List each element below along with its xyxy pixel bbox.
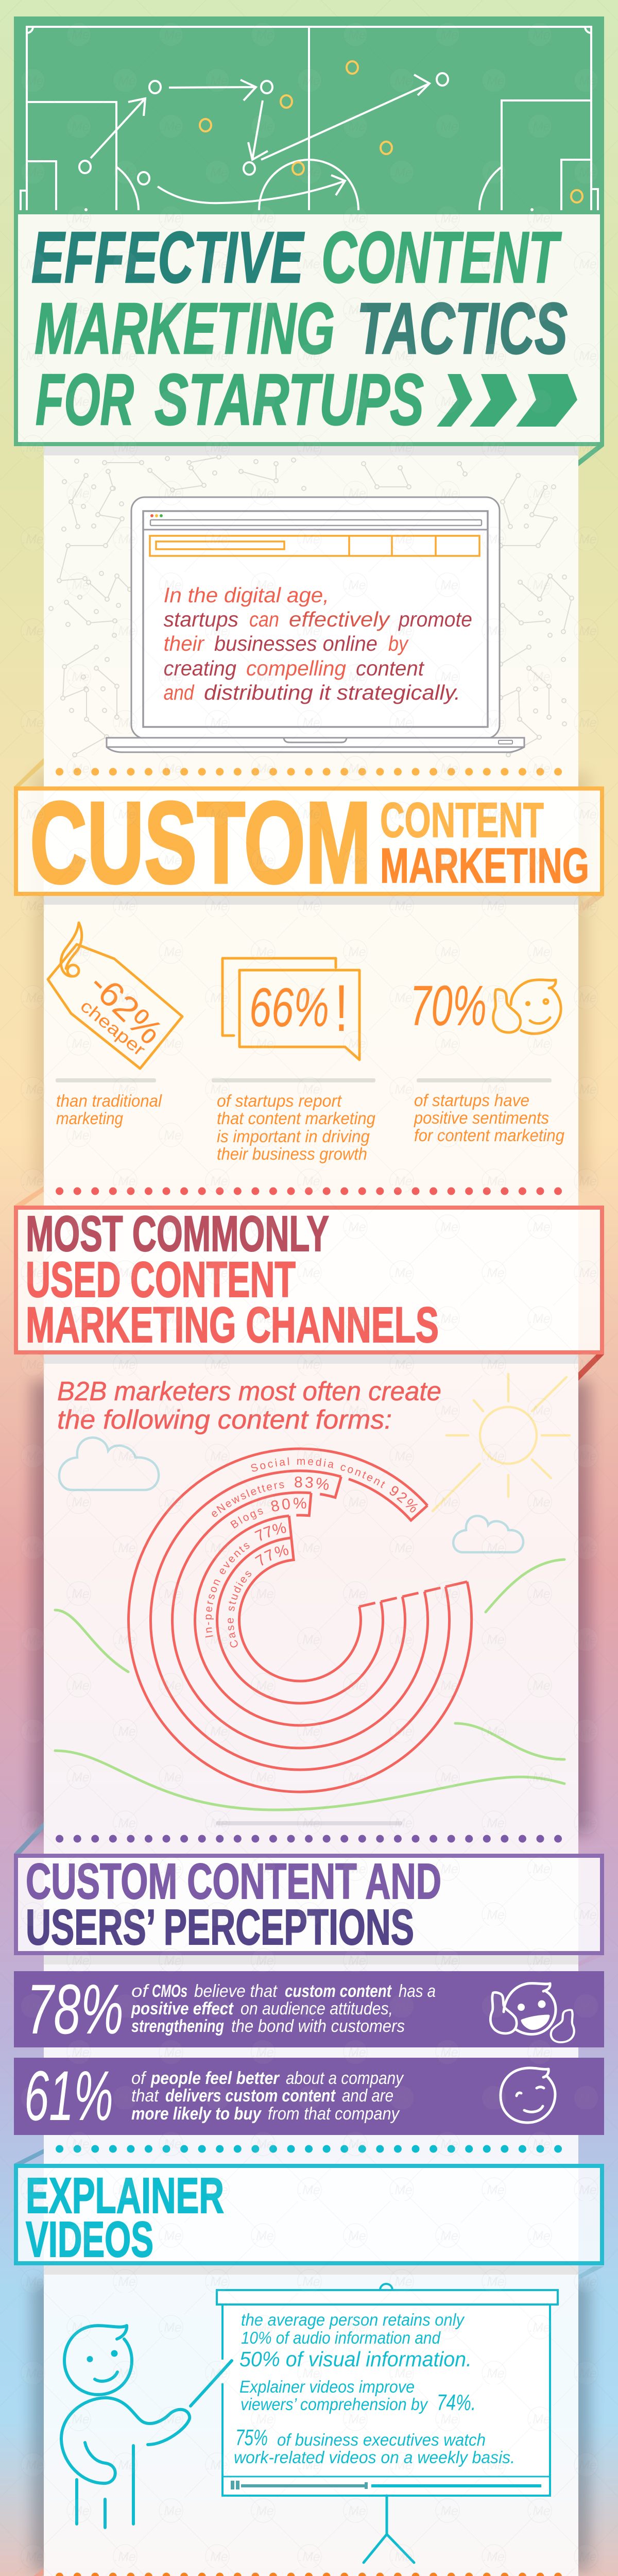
stat bar: 61% of people: more likely to buy	[131, 2104, 262, 2124]
chevron arrows	[437, 374, 577, 427]
chart labels: 83%	[295, 1477, 329, 1490]
stat: 66%: their business growth	[217, 1144, 367, 1163]
stat bar: 78% of CMOs: on audience attitudes,	[241, 1999, 393, 2019]
stat bar: 61% of people	[14, 2057, 604, 2136]
projection screen with video facts	[217, 2284, 558, 2563]
stat: 70%: of startups have	[414, 1091, 529, 1110]
icon: cloud left	[59, 1437, 159, 1490]
caption	[212, 1078, 375, 1082]
intro text: can	[249, 607, 279, 631]
main title: EFFECTIVE	[31, 216, 305, 298]
chart labels: Blogs	[230, 1509, 263, 1529]
intro text	[164, 583, 472, 704]
chart labels	[205, 1457, 418, 1648]
caption	[56, 1078, 156, 1082]
chart labels: Case studies	[228, 1571, 251, 1648]
video facts text: of business executives watch	[277, 2430, 486, 2449]
section heading: custom content marketing: CUSTOM	[30, 777, 371, 907]
stat bar: 61% of people: that	[131, 2086, 159, 2106]
main title: STARTUPS	[154, 359, 424, 440]
stat: 62% cheaper: marketing	[56, 1109, 124, 1128]
stat bar: 61% of people: of	[131, 2069, 147, 2088]
stat bar: 61% of people: people feel better	[150, 2069, 280, 2088]
icon: smiley with thumb up	[493, 980, 561, 1033]
stat bar: 61% of people: 61%	[24, 2057, 113, 2136]
laptop screen	[143, 511, 488, 727]
stat bar: 78% of CMOs: CMOs	[152, 1981, 187, 2001]
title banner	[14, 16, 604, 446]
chart intro text: B2B marketers most often create	[57, 1377, 441, 1406]
icon: cloud right	[453, 1516, 523, 1552]
caption	[417, 1078, 552, 1082]
stat bar: 61% of people: delivers custom content	[165, 2086, 336, 2106]
stat bar: 78% of CMOs: has a	[399, 1981, 436, 2001]
stat bar: 61% of people: about a company	[286, 2069, 404, 2088]
stat: 70%: for content marketing	[414, 1126, 565, 1145]
stat bar: 78% of CMOs: 78%	[27, 1970, 124, 2049]
intro text: creating	[164, 656, 236, 680]
intro text: content	[356, 656, 425, 680]
stat bar: 78% of CMOs: positive effect	[131, 1999, 234, 2019]
intro text: startups	[164, 607, 238, 631]
network background pattern	[49, 456, 572, 755]
video facts text	[234, 2310, 515, 2467]
intro text: and	[164, 681, 195, 704]
paper background	[44, 446, 578, 2576]
main title: FOR	[36, 359, 134, 440]
section heading: custom content marketing: CONTENT	[380, 792, 544, 848]
intro text: promote	[398, 607, 472, 631]
stat bar: 78% of CMOs: believe that	[194, 1981, 278, 2001]
chart intro text	[57, 1377, 441, 1435]
section heading: most commonly used channels: MARKETING CHANNELS	[26, 1297, 439, 1353]
intro text: businesses online	[214, 632, 377, 655]
stat: 70%: 70%	[410, 974, 487, 1038]
stat: 70%: positive sentiments	[414, 1108, 549, 1127]
video facts text: 10% of audio information and	[241, 2328, 441, 2347]
chart labels: 92%	[389, 1486, 418, 1513]
stat: 66%: of startups report	[217, 1091, 342, 1110]
icon: winking smiley	[501, 2068, 555, 2123]
stat bar: 78% of CMOs: of	[131, 1981, 150, 2001]
section heading: most commonly used channels: USED CONTENT	[26, 1251, 296, 1308]
main title	[31, 216, 568, 440]
chart labels: eNewsletters	[212, 1482, 284, 1517]
stat bar: 78% of CMOs: strengthening	[131, 2016, 224, 2036]
stat: 66%: !	[335, 972, 348, 1045]
intro text: distributing it strategically.	[204, 681, 460, 704]
section heading: custom content and users' perceptions: CUSTOM CONTENT AND	[26, 1853, 441, 1909]
players and passes	[79, 73, 448, 203]
video facts text: viewers’ comprehension by	[241, 2395, 428, 2414]
chart labels: 77%	[254, 1545, 288, 1566]
intro text: by	[388, 632, 409, 655]
chart labels: 80%	[271, 1498, 306, 1512]
chart labels: Social media content	[251, 1457, 385, 1488]
stat: 66%: is important in driving	[217, 1127, 370, 1146]
section heading: most commonly used channels: MOST COMMONLY	[26, 1206, 329, 1262]
video facts text: work-related videos on a weekly basis.	[234, 2448, 515, 2467]
video controls	[231, 2481, 541, 2489]
section heading: most commonly used channels	[16, 1206, 602, 1353]
stat: 66%	[212, 958, 376, 1163]
icon: smiley with two thumbs	[490, 1984, 574, 2042]
laptop lid	[131, 497, 500, 738]
stat: 62% cheaper: -62%	[82, 964, 170, 1052]
soccer field tactics board	[21, 27, 598, 211]
stat: 70%	[410, 974, 565, 1145]
video facts text: 50% of visual information.	[239, 2347, 472, 2371]
section heading: explainer videos: EXPLAINER	[26, 2167, 224, 2224]
radial bar chart: content forms	[127, 1448, 473, 1793]
stat: 66%: 66%	[249, 976, 329, 1038]
website navigation bar	[150, 536, 479, 556]
icon: sun	[433, 1374, 570, 1511]
section heading: custom content and users' perceptions: USERS’ PERCEPTIONS	[26, 1899, 414, 1955]
icon: speech bubble	[222, 958, 359, 1060]
hills	[55, 1560, 564, 1810]
intro text: effectively	[289, 607, 391, 631]
chart labels: In-person events	[205, 1543, 249, 1637]
video facts text: 75%	[235, 2425, 268, 2450]
section heading: explainer videos: VIDEOS	[26, 2211, 153, 2267]
presenter character	[61, 2326, 232, 2528]
video facts text: the average person retains only	[241, 2310, 465, 2329]
video facts text: Explainer videos improve	[239, 2377, 415, 2396]
intro text: their	[164, 632, 205, 655]
stat: 66%: that content marketing	[217, 1109, 376, 1128]
section heading: custom content and users' perceptions	[16, 1853, 602, 1955]
video facts text: 74%.	[437, 2390, 476, 2415]
stat bar: 61% of people: from that company	[268, 2104, 400, 2124]
stat bar: 78% of CMOs: custom content	[285, 1981, 392, 2001]
main title: MARKETING	[35, 287, 335, 369]
section heading: explainer videos	[16, 2166, 602, 2267]
icon: price tag	[48, 923, 182, 1069]
intro text: compelling	[246, 656, 346, 680]
chart intro text: the following content forms:	[57, 1405, 392, 1435]
stat bar: 78% of CMOs	[14, 1970, 604, 2049]
stat: 62% cheaper: cheaper	[77, 996, 149, 1060]
stat: 62% cheaper	[48, 923, 182, 1128]
laptop with intro text	[107, 497, 524, 752]
chart labels: 77%	[254, 1522, 286, 1540]
stat bar: 61% of people: and are	[342, 2086, 393, 2106]
laptop base	[107, 738, 524, 752]
stat: 62% cheaper: than traditional	[56, 1091, 163, 1110]
intro text: In the digital age,	[164, 583, 329, 607]
stat bar: 78% of CMOs: the bond with customers	[231, 2016, 405, 2036]
